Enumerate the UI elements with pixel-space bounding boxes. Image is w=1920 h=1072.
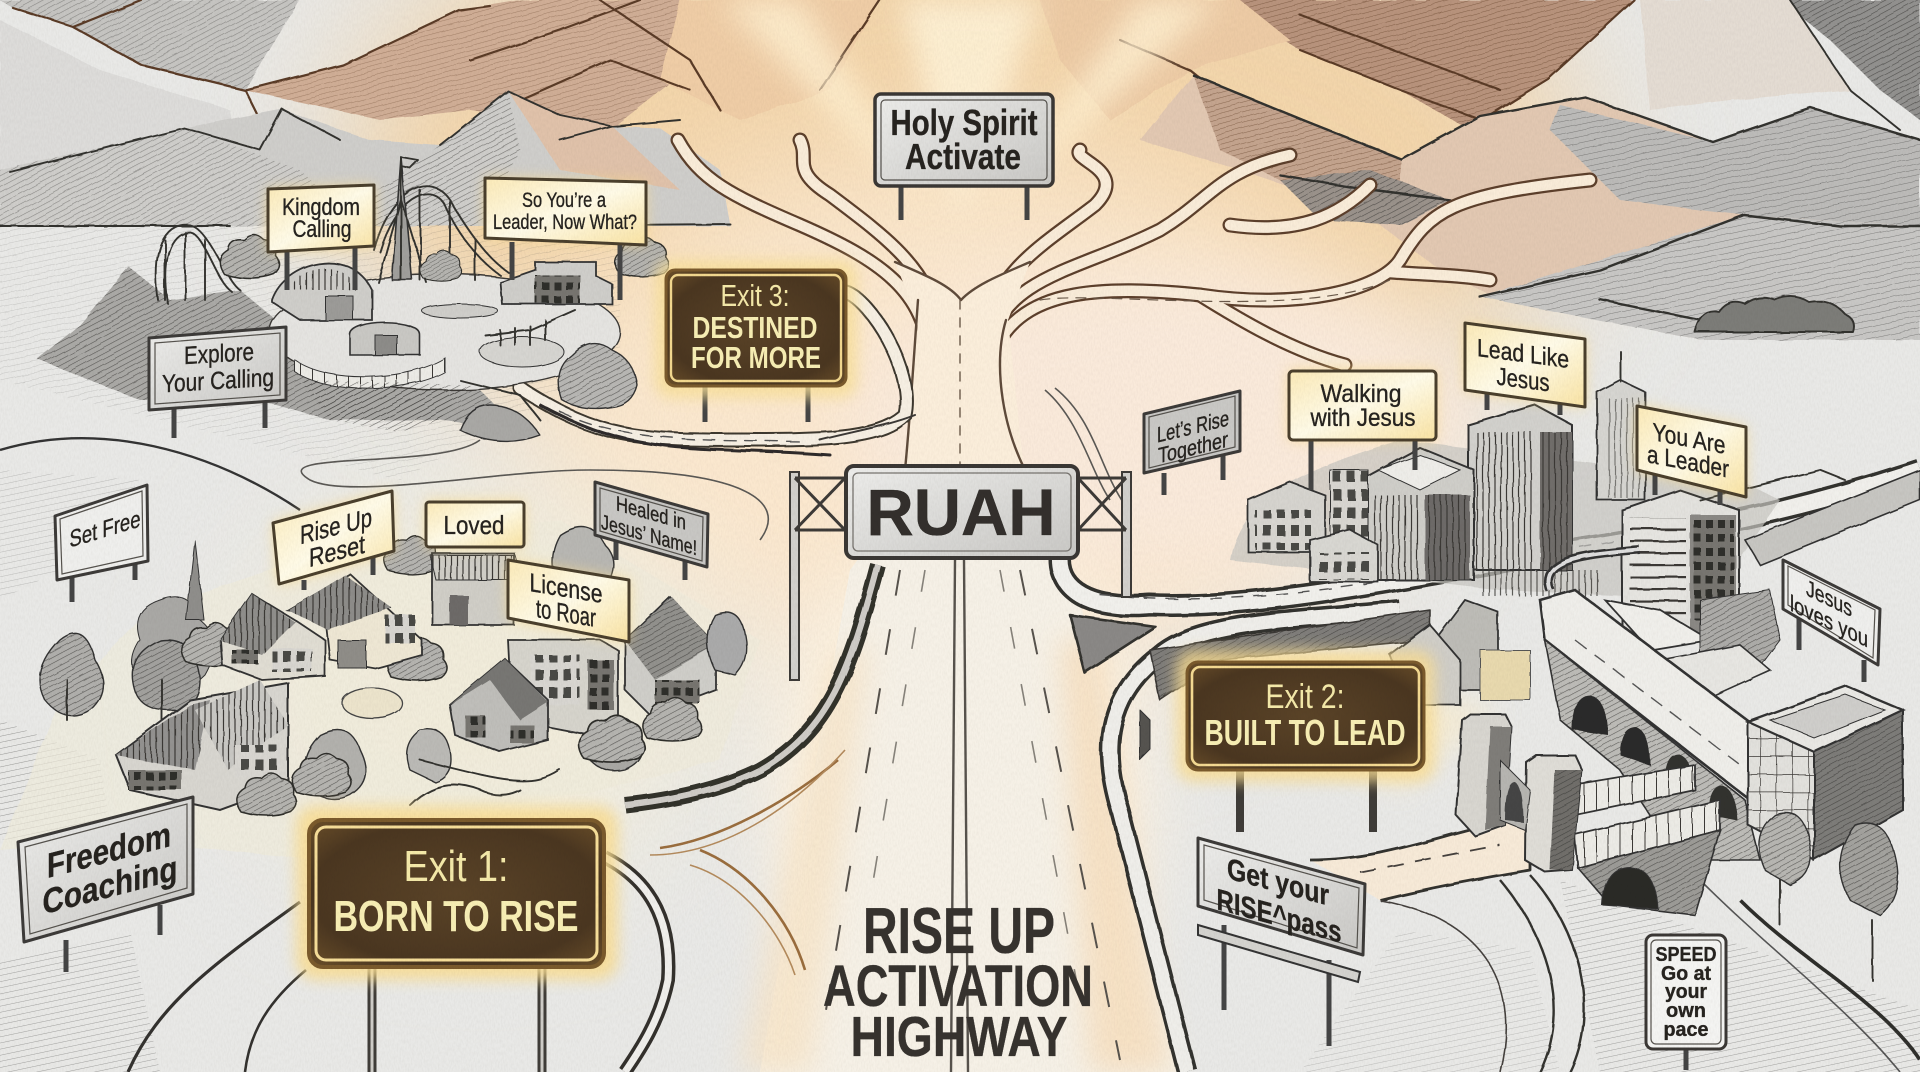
- sign: Holy Spirit Activate: [875, 94, 1053, 220]
- title: Rise Up Activation Highway: ACTIVATION: [823, 954, 1093, 1019]
- sign: Jesus loves you: Jesus: [1806, 575, 1852, 623]
- sign: Exit 2 Built to Lead: BUILT TO LEAD: [1204, 712, 1406, 753]
- sign: Rise Up Reset: [273, 491, 394, 590]
- sign: Exit 2 Built to Lead: Exit 2:: [1266, 678, 1344, 716]
- hatching on bottom fields: [0, 470, 1920, 1072]
- sign: License to Roar: to Roar: [536, 593, 596, 633]
- sign: Exit 1 Born to Rise: BORN TO RISE: [334, 892, 578, 941]
- title: Rise Up Activation Highway: RISE UP: [863, 894, 1055, 967]
- sign: Explore Your Calling: Your Calling: [162, 364, 274, 398]
- exit 3 ramp: [520, 292, 915, 455]
- house 1: [220, 594, 325, 680]
- sign: Exit 3 Destined for More: Exit 3:: [720, 278, 790, 313]
- theme park: Kingdom Calling area: [37, 157, 668, 441]
- glows behind yellow signs: [268, 178, 1746, 642]
- left guard-rail ramp: [625, 565, 878, 805]
- sign: Loved: [426, 502, 524, 547]
- sun rays over the peaks: [720, 0, 1220, 220]
- sign: Explore Your Calling: Explore: [184, 338, 254, 370]
- sign: Exit 3 Destined for More: FOR MORE: [691, 340, 821, 375]
- exit 2 interchange: [1060, 470, 1920, 1072]
- sign: Speed Go at your own pace: [1646, 935, 1726, 1070]
- sign: Exit 3 Destined for More: DESTINED: [692, 310, 818, 345]
- sign: Get your RISE^pass: Get your: [1227, 852, 1329, 913]
- sign: Exit 1 Born to Rise: [296, 806, 618, 1072]
- sign: Lead Like Jesus: Jesus: [1496, 363, 1550, 397]
- sign: RUAH: RUAH: [866, 475, 1056, 549]
- mountains: middle range right: [1140, 75, 1920, 340]
- sign: Freedom Coaching: Freedom: [47, 814, 171, 886]
- trees and pond: [304, 730, 366, 799]
- exit 1 ramps and orange guide lines: [128, 750, 845, 1072]
- house 5: [625, 597, 716, 715]
- ramp loop: [1548, 550, 1640, 590]
- hill under the park: [37, 267, 520, 430]
- overpass to the right: [1745, 470, 1920, 565]
- house 2: [288, 574, 422, 668]
- house 4: [508, 640, 618, 735]
- sign: Kingdom Calling: [268, 185, 374, 290]
- sign: License to Roar: [508, 560, 629, 642]
- sign: So You're a Leader, Now What?: [485, 178, 646, 300]
- small shops: [1435, 600, 1498, 690]
- mountains: far top range: [0, 0, 1920, 170]
- sign: You Are a Leader: You Are: [1652, 418, 1726, 460]
- main tower: [1468, 405, 1572, 570]
- sign: Kingdom Calling: Kingdom: [282, 194, 360, 221]
- sign: Walking with Jesus: Walking: [1320, 380, 1402, 408]
- sign: Kingdom Calling: Calling: [292, 216, 352, 243]
- sign: Rise Up Reset: Rise Up: [300, 502, 372, 550]
- city: Built to Lead area: [1230, 352, 1920, 705]
- sign: Freedom Coaching: [18, 797, 193, 972]
- sign: Exit 2 Built to Lead: [1176, 650, 1435, 832]
- bushes by the ramp: [559, 344, 637, 408]
- sign: Exit 3 Destined for More: [655, 260, 857, 422]
- sign: Holy Spirit Activate: Activate: [905, 136, 1021, 177]
- sign: Walking with Jesus: with Jesus: [1310, 404, 1416, 432]
- corner office building: [1748, 686, 1903, 980]
- sign: Healed in Jesus' Name!: [595, 482, 708, 580]
- sign: Loved: Loved: [444, 510, 504, 540]
- spire tower: [1597, 380, 1645, 500]
- title: Rise Up Activation Highway: [823, 894, 1093, 1069]
- title: Rise Up Activation Highway: HIGHWAY: [850, 1005, 1068, 1069]
- sign: So You're a Leader, Now What?: So You’re a: [522, 189, 606, 212]
- sign: Lead Like Jesus: [1465, 323, 1585, 415]
- stone bridge with arches and towers: [1456, 590, 1780, 915]
- highway lane markings: [826, 560, 1120, 1072]
- sign: Lead Like Jesus: Lead Like: [1477, 334, 1569, 374]
- sign: License to Roar: License: [530, 567, 602, 609]
- mid building: [1364, 448, 1474, 580]
- sign: RUAH: [846, 466, 1078, 558]
- sign: Healed in Jesus' Name!: Jesus’ Name!: [601, 510, 697, 560]
- sign: You Are a Leader: a Leader: [1647, 440, 1729, 484]
- sign: Rise Up Reset: Reset: [309, 529, 366, 573]
- sign: You Are a Leader: [1637, 406, 1746, 505]
- sign: Set Free: Set Free: [70, 506, 140, 554]
- sign: Get your RISE^pass: RISE^pass: [1216, 883, 1342, 950]
- village: Born to Rise area: [0, 520, 760, 860]
- RUAH gantry: [790, 466, 1131, 680]
- house 3: [432, 553, 514, 625]
- sign: Speed Go at your own pace: own: [1666, 1000, 1706, 1022]
- highway road surface: [760, 300, 1187, 1072]
- sign: Holy Spirit Activate: Holy Spirit: [890, 102, 1038, 143]
- sign: Speed Go at your own pace: SPEED: [1656, 944, 1716, 966]
- sign: Get your RISE^pass: [1198, 838, 1365, 1046]
- sign: Speed Go at your own pace: pace: [1664, 1019, 1708, 1041]
- sign: Exit 1 Born to Rise: Exit 1:: [404, 842, 508, 891]
- sign: Speed Go at your own pace: Go at: [1661, 963, 1711, 985]
- sign: Walking with Jesus: [1289, 371, 1436, 490]
- highway side glow: [740, 640, 1170, 1072]
- You Are a Leader building: [1622, 490, 1739, 640]
- sign: Speed Go at your own pace: your: [1665, 981, 1707, 1003]
- sign: Jesus loves you: [1783, 560, 1880, 682]
- warm glow wash: [260, 0, 1580, 1070]
- sign: Freedom Coaching: Coaching: [42, 848, 178, 922]
- mountains: middle range left: [0, 91, 730, 480]
- sign: Set Free: [55, 485, 148, 602]
- sign: Explore Your Calling: [149, 327, 286, 438]
- trees and low blocks: [1700, 590, 1780, 680]
- sign: Let's Rise Together: Together: [1158, 427, 1228, 468]
- house 6: [450, 659, 548, 752]
- sign: Let's Rise Together: Let’s Rise: [1157, 406, 1229, 448]
- sign: Jesus loves you: loves you: [1790, 590, 1868, 653]
- sign: Healed in Jesus' Name!: Healed in: [616, 492, 686, 535]
- house 7: [116, 683, 288, 810]
- low building: [1248, 482, 1325, 552]
- winding creek beside the gantry: [0, 388, 1125, 540]
- sign: So You're a Leader, Now What?: Leader, Now What?: [493, 211, 637, 234]
- sign: Let's Rise Together: [1144, 391, 1240, 495]
- upper road network branching to the mountains: [678, 140, 1590, 480]
